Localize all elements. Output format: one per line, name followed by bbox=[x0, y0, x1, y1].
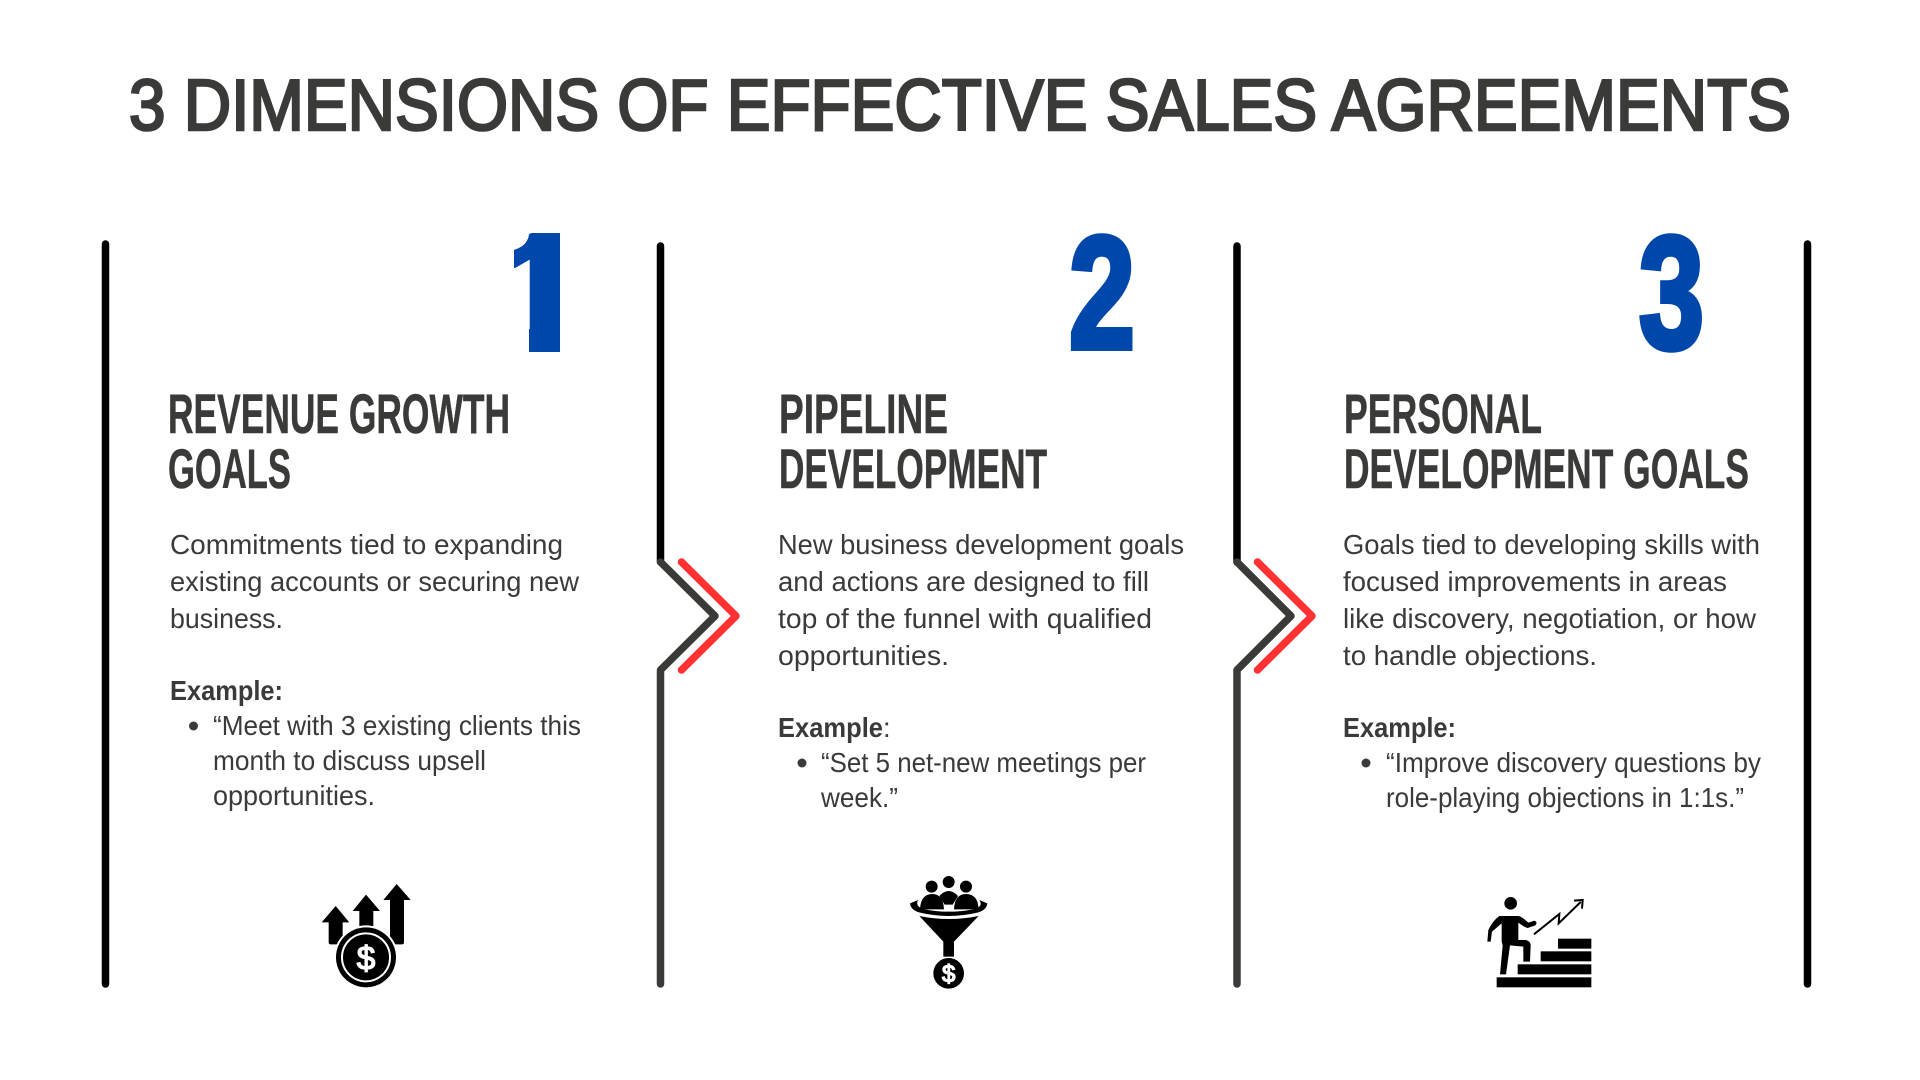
description text: Commitments tied to expanding bbox=[170, 529, 563, 560]
description text: New business development goals bbox=[778, 529, 1184, 560]
description text bbox=[1343, 529, 1760, 671]
example bbox=[170, 675, 581, 811]
example: week.” bbox=[820, 782, 898, 813]
description text: opportunities. bbox=[778, 640, 949, 671]
icon: sales funnel with people and dollar bbox=[910, 876, 987, 989]
example: month to discuss upsell bbox=[213, 745, 486, 776]
number 3: 3 bbox=[1639, 203, 1704, 382]
panel: revenue growth goals bbox=[168, 200, 591, 989]
divider line: right edge bbox=[1804, 244, 1811, 984]
heading: pipeline development: DEVELOPMENT bbox=[779, 437, 1047, 500]
heading: pipeline development bbox=[779, 382, 1047, 500]
divider with chevron: between columns 1 and 2 bbox=[660, 246, 736, 984]
heading: revenue growth goals: REVENUE GROWTH bbox=[168, 382, 510, 445]
divider with chevron: between columns 2 and 3 bbox=[1237, 246, 1312, 984]
example: Example: bbox=[170, 675, 283, 706]
description text: to handle objections. bbox=[1343, 640, 1597, 671]
icon: person climbing stairs with rising arrow bbox=[1487, 897, 1591, 987]
description text: focused improvements in areas bbox=[1343, 566, 1727, 597]
panel: pipeline development bbox=[778, 203, 1184, 989]
description text: top of the funnel with qualified bbox=[778, 603, 1152, 634]
example bbox=[778, 712, 1146, 813]
title: 3 DIMENSIONS OF EFFECTIVE SALES AGREEMENTS bbox=[129, 66, 1791, 146]
example: “Improve discovery questions by bbox=[1386, 747, 1761, 778]
example: role-playing objections in 1:1s.” bbox=[1386, 782, 1744, 813]
number 1: 1 bbox=[491, 200, 591, 385]
heading: revenue growth goals bbox=[168, 382, 510, 500]
heading: pipeline development: PIPELINE bbox=[779, 382, 948, 445]
heading: personal development goals: PERSONAL bbox=[1344, 382, 1542, 445]
icon: sales funnel with people and dollar: $ bbox=[942, 961, 955, 988]
description text: business. bbox=[170, 603, 283, 634]
example: opportunities. bbox=[213, 780, 375, 811]
example: Example: bbox=[1343, 712, 1456, 743]
heading: personal development goals bbox=[1344, 382, 1749, 500]
number 2: 2 bbox=[1069, 203, 1135, 382]
example bbox=[1343, 712, 1761, 813]
description text: and actions are designed to fill bbox=[778, 566, 1149, 597]
description text bbox=[170, 529, 579, 634]
divider line: left edge bbox=[102, 244, 109, 984]
description text: like discovery, negotiation, or how bbox=[1343, 603, 1756, 634]
icon: rising arrows and dollar coin: $ bbox=[357, 940, 375, 977]
icon: rising arrows and dollar coin bbox=[322, 884, 411, 989]
example: Example bbox=[778, 712, 883, 743]
example: “Set 5 net-new meetings per bbox=[821, 747, 1146, 778]
heading: revenue growth goals: GOALS bbox=[168, 437, 291, 500]
example: : bbox=[883, 712, 891, 743]
description text bbox=[778, 529, 1184, 671]
panel: personal development goals bbox=[1343, 203, 1761, 987]
description text: Goals tied to developing skills with bbox=[1343, 529, 1760, 560]
description text: existing accounts or securing new bbox=[170, 566, 579, 597]
example: “Meet with 3 existing clients this bbox=[213, 710, 581, 741]
